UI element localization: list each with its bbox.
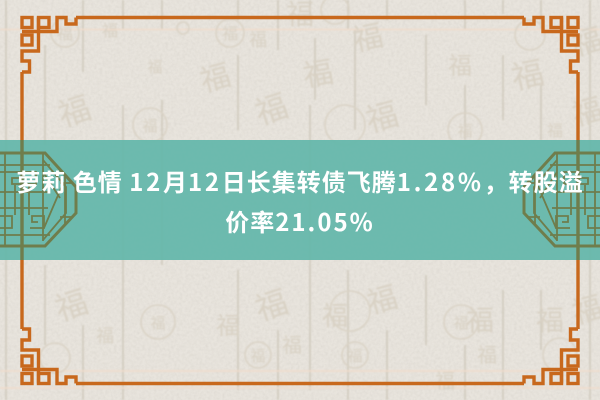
background: paper with faint fu characters: 福 (457, 120, 473, 141)
background: paper with faint fu characters: 福 (49, 277, 93, 330)
background: paper with faint fu characters: 福 (453, 312, 469, 333)
background: paper with faint fu characters: 福 (142, 115, 158, 136)
background: paper with faint fu characters: 福 (448, 46, 472, 81)
background: paper with faint fu characters: 福 (96, 322, 114, 348)
background: paper with faint fu characters: 福 (249, 277, 293, 330)
title text (16, 163, 584, 238)
background: paper with faint fu characters: 福 (216, 306, 240, 341)
background: paper with faint fu characters: 福 (477, 339, 497, 368)
background: paper with faint fu characters: 福 (361, 272, 402, 323)
background: paper with faint fu characters: 福 (347, 345, 363, 366)
title text: 萝莉 色情 12月12日长集转债飞腾1.28%，转股溢 (16, 163, 584, 198)
background: paper with faint fu characters: 福 (249, 26, 267, 52)
background: paper with faint fu characters: 福 (250, 345, 266, 366)
background: paper with faint fu characters: 福 (282, 329, 302, 358)
background: paper with faint fu characters: 福 (52, 83, 96, 136)
background: paper with faint fu characters: 福 (299, 47, 336, 95)
background: paper with faint fu characters: 福 (507, 47, 548, 99)
background: paper with faint fu characters: 福 (536, 299, 564, 339)
title text: 价率21.05% (225, 203, 375, 238)
background: paper with faint fu characters: 福 (249, 81, 293, 134)
background: paper with faint fu characters: 福 (435, 365, 455, 394)
background: paper with faint fu characters: 福 (348, 11, 387, 60)
background: paper with faint fu characters: 福 (102, 17, 118, 41)
background: paper with faint fu characters: 福 (547, 117, 563, 141)
background: paper with faint fu characters: 福 (150, 312, 166, 333)
background: paper with faint fu characters: 福 (222, 20, 238, 44)
background: paper with faint fu characters: 福 (466, 299, 494, 339)
background: paper with faint fu characters: 福 (57, 20, 73, 44)
background: paper with faint fu characters: 福 (194, 50, 235, 101)
teal title band (0, 140, 600, 260)
background: paper with faint fu characters: 福 (322, 296, 348, 333)
background: paper with faint fu characters: 福 (360, 89, 403, 142)
background: paper with faint fu characters: 福 (147, 56, 163, 77)
medallions: octagonal lattice windows on both sides (0, 140, 600, 260)
